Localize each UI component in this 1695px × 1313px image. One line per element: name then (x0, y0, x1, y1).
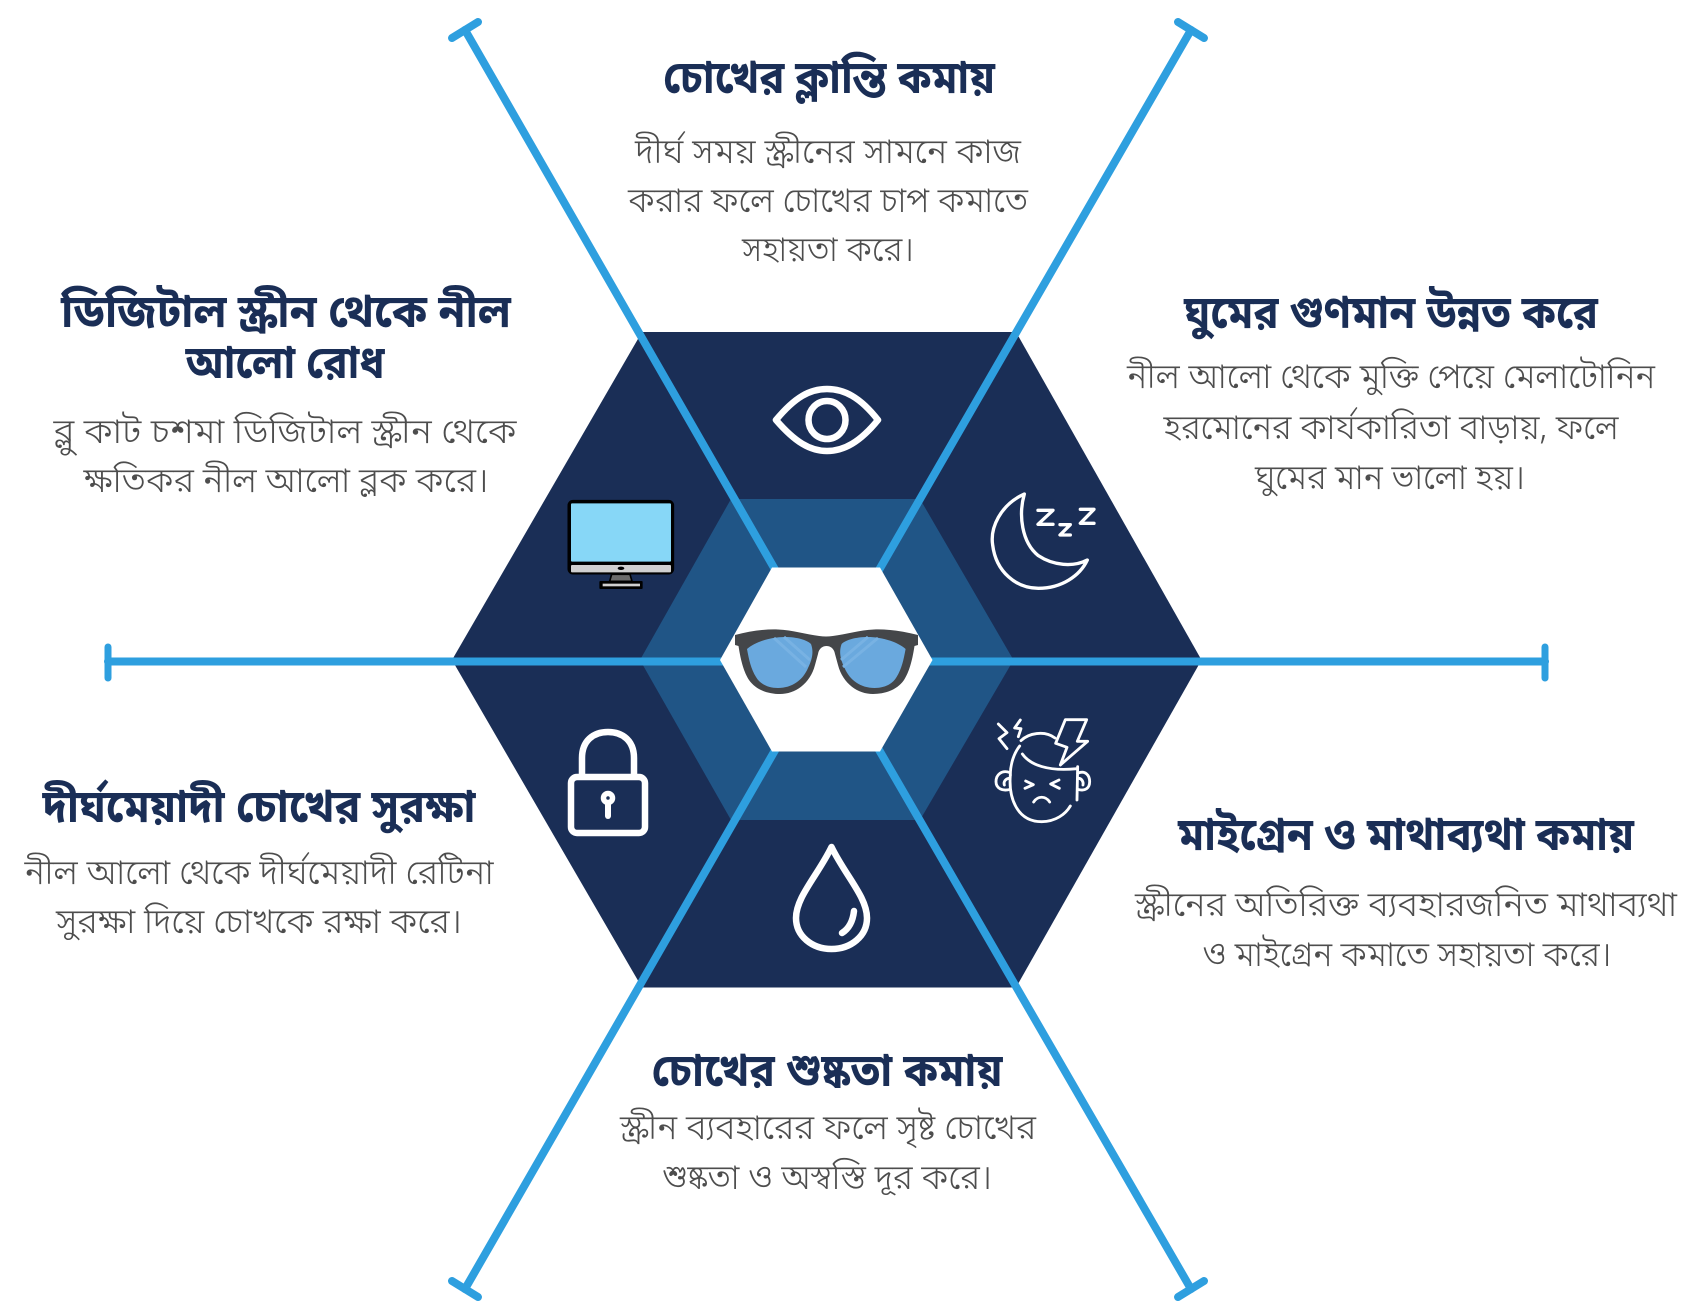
text: lower right benefit: মাইগ্রেন ও মাথাব্যথা কমায় (1177, 808, 1635, 869)
text: upper right benefit: হরমোনের কার্যকারিতা বাড়ায়, ফলে (1163, 406, 1620, 454)
text: upper left benefit: ব্লু কাট চশমা ডিজিটাল স্ক্রীন থেকে (52, 411, 518, 458)
text: lower right benefit: স্ক্রীনের অতিরিক্ত ব্যবহারজনিত মাথাব্যথা (1134, 884, 1678, 931)
text: upper left benefit: ক্ষতিকর নীল আলো ব্লক করে। (83, 460, 489, 507)
icon: eye (776, 389, 878, 451)
text: bottom benefit: স্ক্রীন ব্যবহারের ফলে সৃষ্ট চোখের (619, 1107, 1037, 1154)
text: upper right benefit (1126, 286, 1656, 504)
text: upper left benefit (52, 285, 518, 507)
text: upper left benefit: আলো রোধ (185, 336, 386, 397)
text: top benefit (627, 51, 1029, 276)
text: lower left benefit: সুরক্ষা দিয়ে চোখকে রক্ষা করে। (55, 901, 462, 948)
text: top benefit: দীর্ঘ সময় স্ক্রীনের সামনে কাজ (634, 130, 1022, 178)
hexagon: white centre (720, 568, 932, 752)
icon: padlock (571, 732, 645, 833)
icon: blue cut glasses (735, 629, 918, 694)
text: upper right benefit: ঘুমের মান ভালো হয়। (1254, 458, 1525, 504)
text: lower left benefit: দীর্ঘমেয়াদী চোখের সুরক্ষা (42, 779, 476, 841)
text: top benefit: করার ফলে চোখের চাপ কমাতে (627, 181, 1029, 227)
text: top benefit: সহায়তা করে। (741, 230, 914, 276)
text: upper left benefit: ডিজিটাল স্ক্রীন থেকে নীল (60, 285, 512, 346)
icon: headache face (996, 720, 1090, 822)
text: bottom benefit (619, 1044, 1037, 1204)
text: lower left benefit: নীল আলো থেকে দীর্ঘমেয়াদী রেটিনা (24, 851, 495, 899)
text: lower left benefit (24, 779, 495, 948)
icon: moon and zzz (992, 494, 1094, 588)
text: lower right benefit: ও মাইগ্রেন কমাতে সহায়তা করে। (1202, 934, 1612, 981)
text: bottom benefit: শুষ্কতা ও অস্বস্তি দূর করে। (662, 1157, 992, 1204)
text: top benefit: চোখের ক্লান্তি কমায় (663, 51, 996, 112)
icon: monitor (569, 501, 673, 589)
text: lower right benefit (1134, 808, 1678, 981)
text: upper right benefit: নীল আলো থেকে মুক্তি পেয়ে মেলাটোনিন (1126, 356, 1656, 403)
icon: water drop (796, 847, 867, 949)
text: upper right benefit: ঘুমের গুণমান উন্নত করে (1183, 286, 1599, 347)
hexagon: middle ring (640, 499, 1014, 820)
text: bottom benefit: চোখের শুষ্কতা কমায় (652, 1044, 1003, 1105)
hexagon: outer navy (452, 332, 1202, 988)
